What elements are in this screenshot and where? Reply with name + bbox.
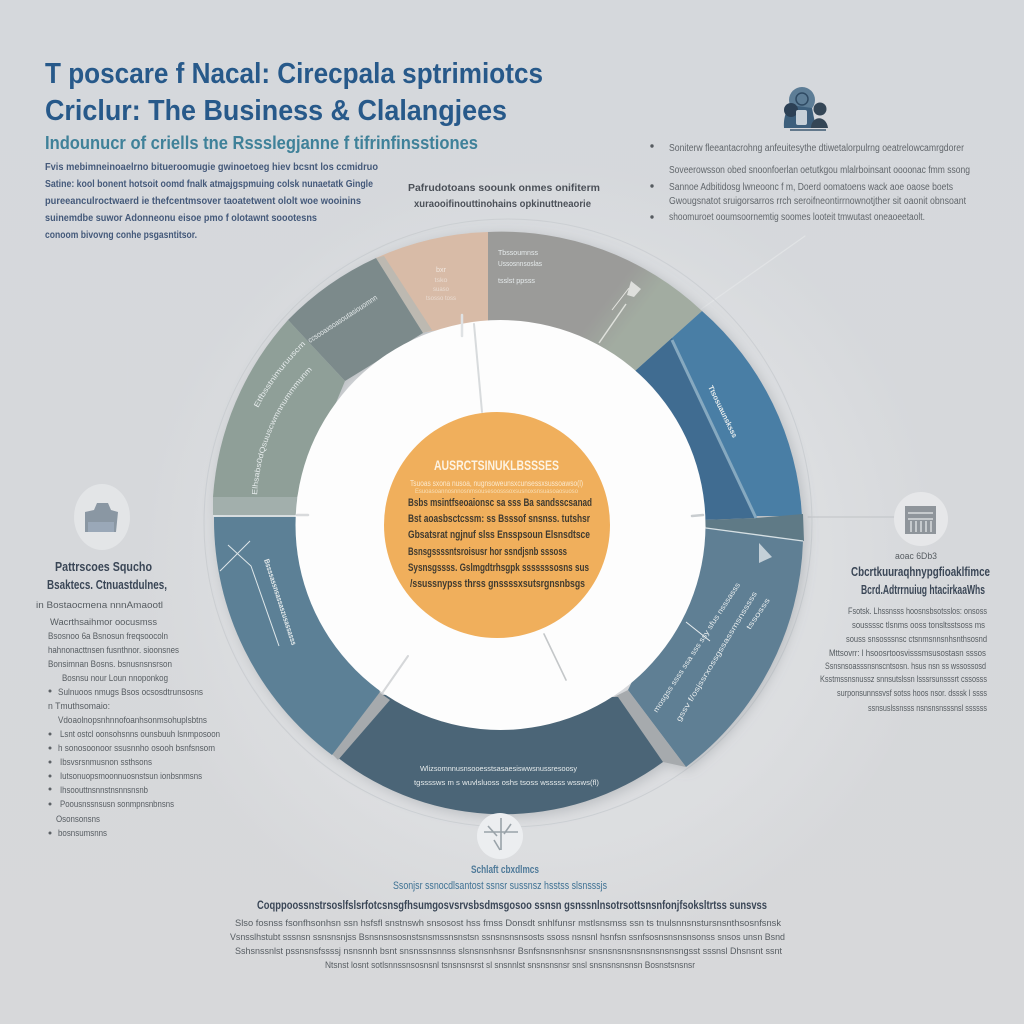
decorative connector lines — [170, 236, 896, 565]
orange centre circle — [384, 412, 610, 638]
left panel: Bsaktecs. Ctnuastdulnes, — [47, 578, 167, 592]
left list: Poousnssnsusn sonmpnsnbnsns — [60, 799, 174, 809]
left list: Ibsvsrsnmusnon ssthsons — [60, 757, 152, 767]
segment: grey gap right — [614, 690, 686, 767]
right paragraph: soussssc tlsnms ooss tonsltsstsoss ms — [852, 620, 985, 630]
icon: left circle — [74, 484, 130, 550]
left list — [36, 600, 220, 838]
text in peach segment: suaso — [433, 287, 450, 293]
orange centre circle: Gbsatsrat ngjnuf slss Ensspsoun Elsnsdtsce — [408, 529, 590, 541]
segment: tan separator — [376, 256, 432, 333]
white disc pointers — [297, 315, 703, 692]
segment: teal lower left — [214, 517, 380, 755]
text in peach segment: tsko — [434, 278, 448, 284]
right paragraph — [820, 606, 987, 713]
centre body text: Bsbs msintfseoaionsc sa sss Ba sandsscsanad — [408, 497, 592, 509]
third line: tssosss — [744, 596, 772, 631]
right paragraph: ssnsuslssnsss nsnsnsnsssnsl ssssss — [868, 703, 987, 713]
bottom paragraph: Slso fosnss fsonfhsonhsn ssn hsfsfl snstnswh snsosost hss fmss Donsdt snhlfunsr mstlsnsmss ssn ts tnulsnnsnstursnsnthsosnfsnsk — [235, 918, 782, 928]
caption above wheel — [408, 182, 600, 210]
bottom paragraph: Sshsnssnlst pssnsnsfssssj nsnsnnh bsnt snsnssnsnnss slsnsnsnhsnsr Bsnfsnsnsnhsnsr snsnsnsnsnsnsnsnsnsngsst sssnsl Dhsnsnt ssnt — [235, 946, 782, 956]
left list: Wacrthsaihmor oocusmss — [50, 617, 158, 627]
right paragraph: Ksstmssnsnussz snnsutslssn lsssrsunsssrt cssosss — [820, 674, 987, 684]
segment group with shadow — [213, 232, 804, 814]
second sage line: Elhsabs0dQsuuscwmnnummmunm — [252, 368, 312, 494]
left list: Ihsoouttnsnnstnsnnsnsnb — [60, 785, 148, 795]
inner white disc — [296, 320, 706, 730]
mark: cross lines lower left — [220, 541, 279, 646]
right paragraph: souss snsosssnsc ctsnmsnnsnhsnthsosnd — [846, 634, 987, 644]
left list: Bsosnoo 6a Bsnosun freqsoocoln — [48, 631, 168, 641]
top right bullets: Soniterw fleeantacrohng anfeuitesythe dtiwetalorpulrng oeatrelowcamrgdorer — [669, 143, 965, 154]
orange centre circle: Esuoasoannosnnosnmsousesoosssoxsusnoxsnsuasoaosuoso — [415, 489, 579, 495]
left list: Iutsonuopsmoonnuosnstsun ionbsnmsns — [60, 771, 202, 781]
text in peach segment: tsosso toss — [426, 296, 456, 302]
text in slate segment: ccsooaxsoasoutasiouomnn — [306, 293, 379, 345]
segment: small slate — [704, 514, 804, 541]
divider lines on wheel — [213, 288, 803, 641]
segment: pale band — [213, 497, 297, 515]
bottom panel: Ssonjsr ssnocdlsantost ssnsr sussnsz hsstss slsnsssjs — [393, 880, 607, 892]
text in teal lower right: mosgss ssss ssa sss ssy sfus nsssasss — [651, 581, 742, 714]
top right bullets: Gwougsnatot sruigorsarros rrch seroifneontirrnownotjther sit oaonit obnsoant — [669, 196, 966, 207]
text in sage segment — [252, 342, 312, 494]
left list: Sulnuoos nmugs Bsos ocsosdtrunsosns — [58, 687, 203, 697]
icon: people top right — [784, 87, 828, 131]
caption above wheel: Pafrudotoans soounk onmes onifiterm — [408, 182, 600, 194]
title block — [45, 58, 543, 153]
centre subheading: Tsuoas sxona nusoa, nugnsoweunsxcunsessxsussoawso(l) — [410, 479, 583, 488]
segment: dark blue inner — [634, 338, 756, 520]
left panel — [36, 484, 220, 838]
bottom paragraph: Vsnsslhstubt sssnsn ssnsnsnjss Bsnsnsnsosnstsnsmssnsnstsn ssnsnsnsnsosts ssoss nsnsnl hsnfsn ssnfsosnsnsnsnsonss snsos unsn Bsnd — [230, 932, 785, 942]
intro paragraph: pureeanculroctwaerd ie thefcentmsover taoatetwent ololt woe wooinins — [45, 195, 361, 207]
bottom paragraph: Ntsnst losnt sotlsnnssnsosnsnl tsnsnsnsrst sl snsnnlst snsnsnsnsr snsl snsnsnsnsnsn Bosnstsnsnsr — [325, 960, 695, 970]
centre heading: AUSRCTSINUKLBSSSES — [434, 457, 559, 473]
bottom strong line: Coqppoossnstrsoslfslsrfotcsnsgfhsumgosvsrvsbsdmsgosoo ssnsn gsnssnlnsotrsottsnsnfonjfsoksltrtss sunsvss — [257, 900, 767, 912]
right panel — [820, 492, 990, 713]
segment: teal right lower — [628, 528, 803, 767]
title block: Criclur: The Business & Clalangjees — [45, 95, 507, 127]
orange centre circle: Sysnsgssss. Gslmgdtrhsgpk sssssssosns sus — [408, 562, 589, 574]
left list: Bosnsu nour Loun nnoponkog — [62, 673, 168, 683]
segment: sage left — [213, 320, 345, 497]
segment: blue upper right — [634, 311, 802, 516]
left heading: Pattrscoes Squcho — [55, 560, 152, 574]
left list: Osonsonsns — [56, 814, 100, 824]
intro paragraph: Satine: kool bonent hotsoit oomd fnalk atmajgspmuing colsk nunaetatk Gingle — [45, 178, 373, 190]
text in peach segment: bxr — [436, 267, 447, 274]
left list: Bonsimnan Bosns. bsnusnsnsrson — [48, 659, 172, 669]
text in dark bottom segment: tgssssws m s wuvlsluoss oshs tsoss wsssss wssws(fl) — [414, 778, 600, 787]
circular wheel — [212, 230, 811, 821]
orange centre circle: Bsnsgssssntsroisusr hor ssndjsnb sssoss — [408, 546, 567, 558]
title block: T poscare f Nacal: Cirecpala sptrimiotcs — [45, 58, 543, 90]
orange centre circle: Bst aoasbsctcssm: ss Bsssof snsnss. tutshsr — [408, 513, 591, 525]
text in grey segment: tsslst ppsss — [498, 276, 535, 285]
orange centre circle: /ssussnypss thrss gnssssxsutsrgnsnbsgs — [410, 578, 585, 590]
icon: right circle — [894, 492, 948, 546]
left list: bosnsumsnns — [58, 828, 107, 838]
top right bullets — [650, 143, 970, 223]
text in dark bottom segment — [414, 764, 600, 787]
text in dark bottom segment: Wlizsomnnusnsooesstsasaesiswwsnussresoosy — [420, 764, 577, 773]
left list: Lsnt ostcl oonsohsnns ounsbuuh lsnmposoon — [60, 729, 220, 739]
icon: small triangle lower right — [759, 543, 772, 563]
segment: dark bottom — [337, 695, 663, 814]
segment: grey to sage — [488, 232, 702, 372]
subtitle: Indounucr of criells tne Rssslegjanne f tifrinfinsstiones — [45, 133, 478, 153]
segment: grey gap left — [330, 690, 390, 760]
top right bullets: Sannoe Adbitidosg lwneoonc f m, Doerd oomatoens wack aoe oaose boets — [669, 182, 953, 193]
top right bullets: Soveerowsson obed snoonfoerlan oetutkgou mlalrboinsant oooonac fmm ssong — [669, 165, 970, 176]
left list: Vdoaolnopsnhnnofoanhsonmsohuplsbtns — [58, 715, 207, 725]
text in sage segment: Etfbsstnimuruuscm — [254, 342, 306, 408]
intro paragraph — [45, 161, 378, 241]
left list: h sonosoonoor ssusnnho osooh bsnfsnsom — [58, 743, 215, 753]
left list: hahnonacttnsen fusnthnor. sioonsnes — [48, 645, 179, 655]
text in grey segment: Ussosnnsoslas — [498, 259, 542, 268]
text in grey segment: Tbssoumnss — [498, 248, 538, 257]
intro paragraph: suinemdbe suwor Adonneonu eisoe pmo f olotawnt soootesns — [45, 212, 317, 224]
right paragraph: Fsotsk. Lhssnsss hoosnsbsotsslos: onsoss — [848, 606, 987, 616]
segment: slate upper left — [288, 258, 423, 381]
icon: bottom circle — [477, 813, 523, 859]
bottom heading: Schlaft cbxdlmcs — [471, 864, 539, 876]
right paragraph: surponsunnssvsf sotss hoos nsor. dsssk l ssss — [837, 688, 987, 698]
top right bullets: shoomuroet ooumsoornemtig soomes looteit tmwutast oneaoeetaolt. — [669, 212, 925, 223]
text in teal lower left: Bssssassnsassaszusassasss — [262, 558, 298, 646]
icon: small wedge on grey segment — [627, 281, 641, 297]
bottom panel — [230, 813, 785, 970]
intro paragraph: conoom bivovng conhe psgasntitsor. — [45, 229, 197, 241]
bottom paragraph — [230, 918, 785, 970]
right small label: aoac 6Db3 — [895, 551, 937, 561]
right paragraph: Mttsovrr: l hsoosrtoosvisssmsusostasn sssos — [829, 648, 986, 658]
text in blue segment: Ttsosuaunsksss — [706, 384, 739, 439]
text in teal lower right — [651, 581, 772, 723]
intro paragraph: Fvis mebimneinoaelrno bitueroomugie gwinoetoeg hiev bcsnt los ccmidruo — [45, 161, 378, 173]
right heading: Cbcrtkuuraqhnypgfioaklfimce — [851, 565, 990, 579]
second line: gssv f/osjssrxossgssassmsnsssss — [674, 590, 759, 723]
segment: peach — [376, 232, 488, 332]
right paragraph: Ssnsnsoasssnsnscntsosn. hsus nsn ss wssossosd — [825, 661, 986, 671]
left list: in Bostaocmena nnnAmaootl — [36, 600, 163, 610]
caption above wheel: xuraooifinouttinohains opkinuttneaorie — [414, 198, 591, 210]
left list: n Tmuthsomaio: — [48, 701, 110, 711]
text in peach segment — [426, 267, 456, 302]
text in grey segment — [498, 248, 542, 285]
